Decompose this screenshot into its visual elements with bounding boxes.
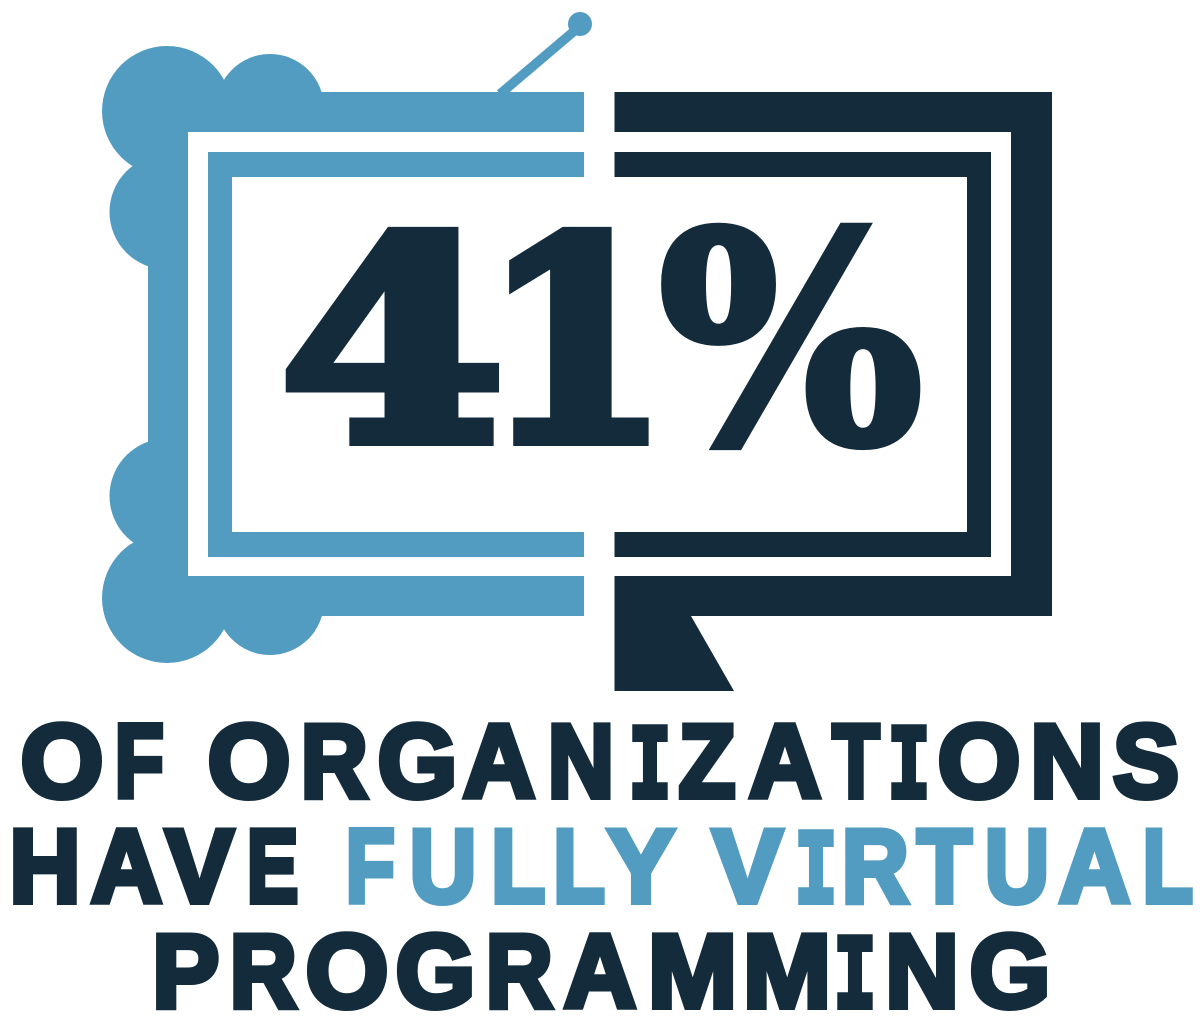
big number: 41%: 4 xyxy=(279,178,505,506)
caption line 1: OF ORGANIZATIONS: G xyxy=(378,704,457,820)
big number: 41%: 1 xyxy=(482,178,670,506)
caption line 1: OF ORGANIZATIONS: A xyxy=(463,704,535,820)
caption line 1: OF ORGANIZATIONS: F xyxy=(115,704,164,820)
caption line 2: FULLY VIRTUAL highlighted: U xyxy=(985,809,1049,925)
caption line 2: FULLY VIRTUAL highlighted: A xyxy=(1059,809,1130,925)
caption line 1: OF ORGANIZATIONS: R xyxy=(301,704,368,820)
caption line 1: OF ORGANIZATIONS: O xyxy=(21,704,103,820)
caption line 2: FULLY VIRTUAL highlighted: L xyxy=(553,809,605,925)
caption line 2: FULLY VIRTUAL highlighted: R xyxy=(842,809,909,925)
caption line 1: OF ORGANIZATIONS: O xyxy=(938,704,1020,820)
caption line 2: HAVE: H xyxy=(9,809,81,925)
caption line 2: FULLY VIRTUAL highlighted xyxy=(346,809,1193,934)
caption line 2: HAVE: A xyxy=(91,809,162,925)
caption line 1: OF ORGANIZATIONS xyxy=(21,704,1179,829)
caption line 2: HAVE: V xyxy=(166,809,234,925)
caption line 1: OF ORGANIZATIONS: I xyxy=(888,709,930,829)
caption line 2: FULLY VIRTUAL highlighted: T xyxy=(917,809,972,925)
television left half: blue scalloped frame xyxy=(102,12,592,663)
caption line 2: FULLY VIRTUAL highlighted: L xyxy=(491,809,545,925)
television right half: dark frame and stand xyxy=(614,92,1052,691)
caption line 1: OF ORGANIZATIONS: A xyxy=(749,704,821,820)
caption line 1: OF ORGANIZATIONS: Z xyxy=(679,704,735,820)
caption line 1: OF ORGANIZATIONS: O xyxy=(208,704,290,820)
caption line 1: OF ORGANIZATIONS: S xyxy=(1113,704,1179,820)
antenna xyxy=(500,12,592,94)
caption line 1: OF ORGANIZATIONS: N xyxy=(1030,704,1104,820)
caption line 2: FULLY VIRTUAL highlighted: V xyxy=(712,809,782,925)
big number: 41%: % xyxy=(658,171,923,511)
caption line 2: FULLY VIRTUAL highlighted: Y xyxy=(608,809,674,925)
caption line 1: OF ORGANIZATIONS: N xyxy=(548,704,614,820)
caption line 2: FULLY VIRTUAL highlighted: F xyxy=(346,809,395,925)
big number: 41% xyxy=(279,171,923,511)
caption line 2: FULLY VIRTUAL highlighted: U xyxy=(410,809,476,925)
caption line 1: OF ORGANIZATIONS: T xyxy=(832,704,880,820)
caption line 3: PROGRAMMING xyxy=(152,914,1050,1020)
caption line 1: OF ORGANIZATIONS: I xyxy=(629,709,671,829)
caption line 2: FULLY VIRTUAL highlighted: I xyxy=(795,814,837,934)
icon: television xyxy=(102,12,1052,691)
caption line 2: HAVE: E xyxy=(247,809,298,925)
caption line 2: HAVE xyxy=(9,809,298,925)
